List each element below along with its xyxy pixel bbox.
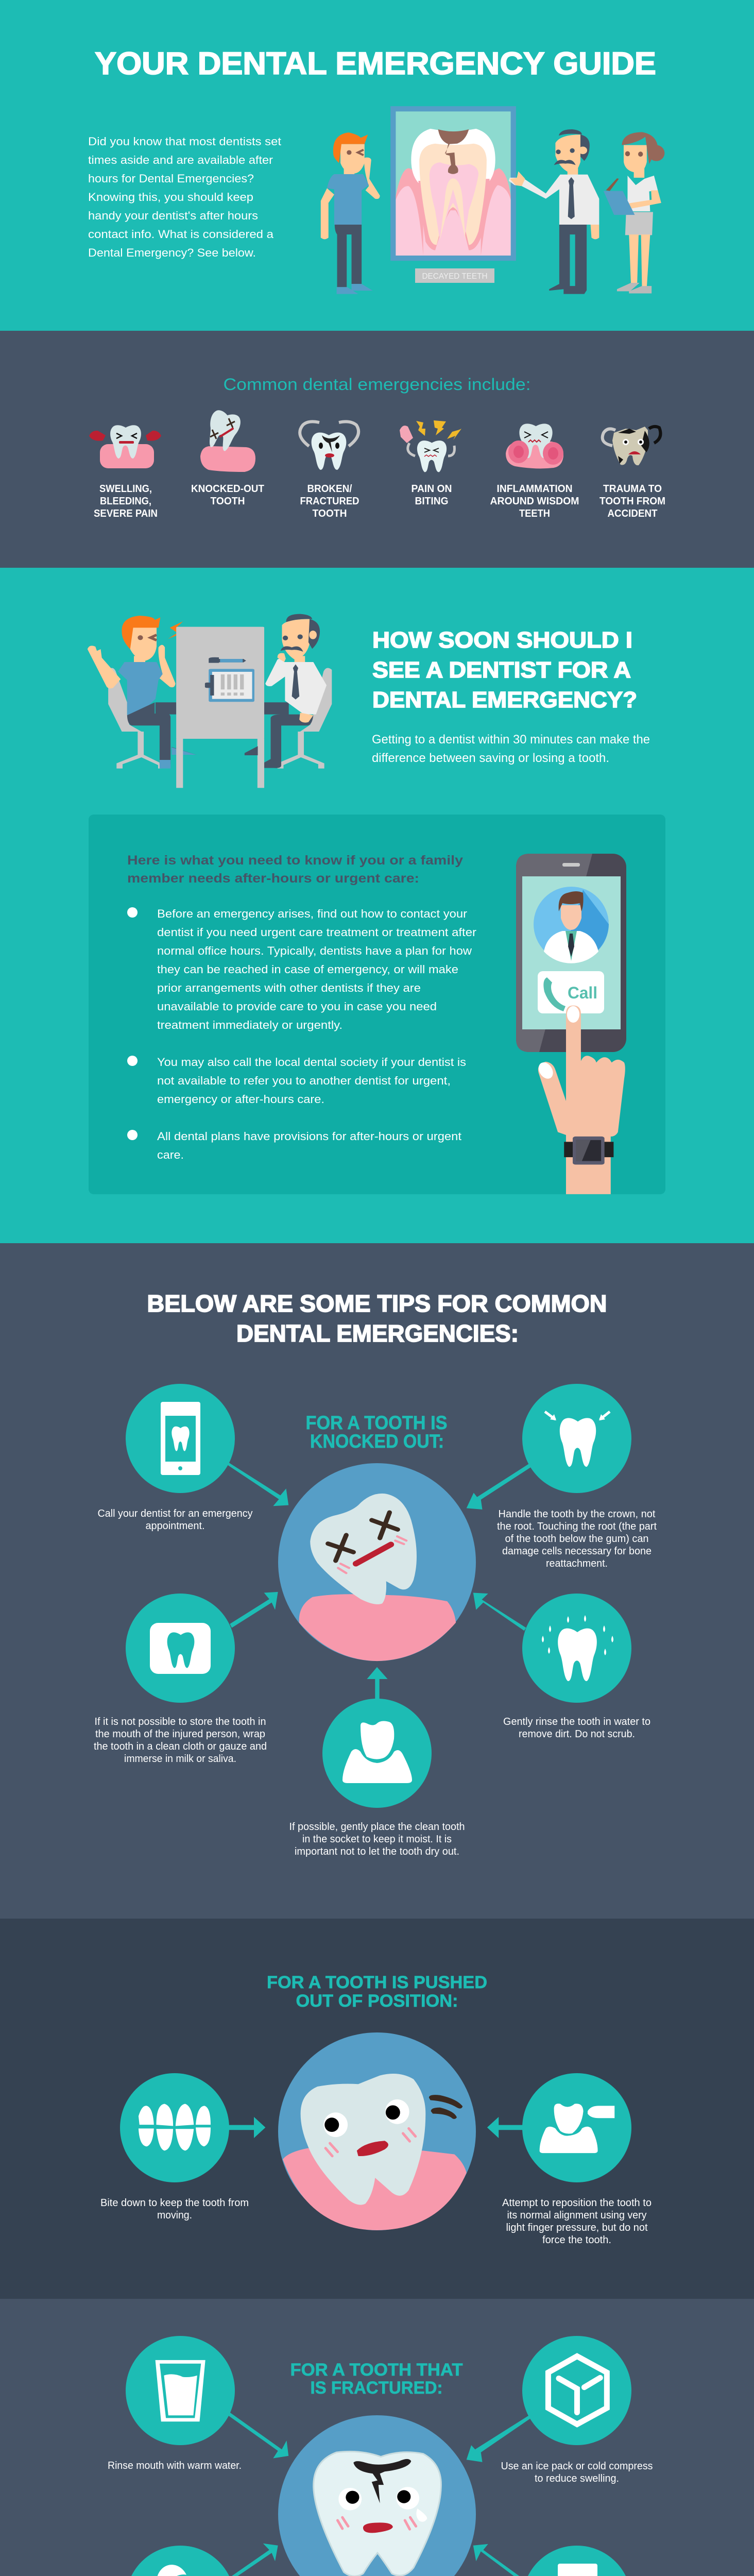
box heading: Here is what you need to know if you or a family bbox=[127, 853, 463, 868]
character: patient bbox=[321, 132, 380, 294]
labels: PAIN ON bbox=[411, 483, 452, 495]
intro text: contact info. What is considered a bbox=[88, 228, 274, 241]
labels: BROKEN/ bbox=[307, 483, 352, 495]
tip: rinse in water: Gently rinse the tooth in water to bbox=[503, 1716, 650, 1727]
labels: ACCIDENT bbox=[608, 508, 657, 519]
tip: store in milk or saliva: immerse in milk or saliva. bbox=[124, 1753, 236, 1765]
tip: reposition: its normal alignment using very bbox=[507, 2210, 647, 2221]
title: YOUR DENTAL EMERGENCY GUIDE bbox=[95, 46, 656, 81]
bullet 1: they can be reached in case of emergency, or will make bbox=[157, 963, 458, 976]
central tooth: out of position bbox=[278, 2032, 476, 2230]
tip: rinse mouth bbox=[108, 2336, 242, 2471]
tip: place in socket bbox=[289, 1699, 465, 1857]
bullet 3: care. bbox=[157, 1148, 184, 1161]
heading: HOW SOON SHOULD I bbox=[372, 628, 632, 653]
tip: place in socket: in the socket to keep it moist. It is bbox=[302, 1834, 452, 1845]
bullet 1: normal office hours. Typically, dentists have a plan for how bbox=[157, 944, 472, 957]
tip: bite down bbox=[100, 2073, 249, 2221]
labels: BITING bbox=[415, 496, 448, 507]
box heading bbox=[127, 853, 463, 886]
intro text: hours for Dental Emergencies? bbox=[88, 172, 254, 185]
tip: place in socket: important not to let the tooth dry out. bbox=[295, 1846, 459, 1857]
panel: tips knocked out bbox=[0, 1243, 754, 1919]
intro text: times aside and are available after bbox=[88, 154, 273, 166]
icon: trauma tooth bbox=[603, 427, 660, 465]
labels: TEETH bbox=[519, 508, 550, 519]
intro text: handy your dentist's after hours bbox=[88, 209, 258, 222]
heading: Common dental emergencies include: bbox=[224, 375, 530, 394]
subheading bbox=[267, 1973, 487, 2011]
arrows bbox=[229, 2117, 523, 2138]
icon: knocked-out tooth bbox=[200, 409, 255, 472]
intro text bbox=[88, 135, 281, 259]
bullet 1: dentist if you need urgent care treatment or treatment after bbox=[157, 926, 476, 939]
subheading: OUT OF POSITION: bbox=[296, 1991, 458, 2011]
tip: call your dentist: Call your dentist for an emergency bbox=[98, 1508, 252, 1519]
panel: after-hours box bbox=[89, 815, 665, 1194]
intro text: Dental Emergency? See below. bbox=[88, 246, 256, 259]
labels: BLEEDING, bbox=[100, 496, 151, 507]
tip: place in socket: If possible, gently place the clean tooth bbox=[289, 1821, 465, 1833]
panel: how soon bbox=[0, 568, 754, 1243]
labels: TRAUMA TO bbox=[603, 483, 662, 495]
tip: store in milk or saliva bbox=[94, 1594, 267, 1765]
intro text: Did you know that most dentists set bbox=[88, 135, 281, 148]
labels: TOOTH bbox=[210, 496, 245, 507]
character: dentist bbox=[509, 129, 599, 294]
subheading bbox=[306, 1412, 447, 1452]
tip: store in milk or saliva: the mouth of the injured person, wrap bbox=[95, 1728, 265, 1740]
tip: rinse mouth: Rinse mouth with warm water. bbox=[108, 2460, 242, 2471]
icon: phone with call button bbox=[516, 854, 626, 1052]
central tooth: knocked out bbox=[278, 1463, 476, 1661]
text block: difference between saving or losing a tooth. bbox=[372, 751, 609, 765]
bullet 2 bbox=[127, 1056, 466, 1106]
icon: inflammation around wisdom teeth bbox=[506, 423, 563, 468]
tip: bite down: moving. bbox=[157, 2210, 192, 2221]
heading: DENTAL EMERGENCY? bbox=[372, 687, 637, 713]
panel: common dental emergencies bbox=[0, 331, 754, 568]
subheading: FOR A TOOTH THAT bbox=[290, 2360, 463, 2380]
bullet 2: not available to refer you to another dentist for urgent, bbox=[157, 1074, 451, 1087]
subheading bbox=[290, 2360, 463, 2398]
bullet 3 bbox=[127, 1130, 461, 1161]
tip: reposition bbox=[502, 2073, 652, 2246]
arrows bbox=[227, 1461, 531, 1700]
intro text: Knowing this, you should keep bbox=[88, 191, 253, 204]
tip: reposition: light finger pressure, but do not bbox=[506, 2222, 648, 2233]
bullet 2: You may also call the local dental society if your dentist is bbox=[157, 1056, 466, 1069]
tip: store in milk or saliva: the tooth in a clean cloth or gauze and bbox=[94, 1741, 267, 1752]
tip: bite down: Bite down to keep the tooth from bbox=[100, 2197, 249, 2209]
heading: DENTAL EMERGENCIES: bbox=[236, 1320, 519, 1347]
tip: call your dentist: appointment. bbox=[145, 1520, 205, 1532]
subheading: IS FRACTURED: bbox=[310, 2378, 443, 2398]
labels bbox=[94, 483, 665, 519]
tip: handle by the crown: Handle the tooth by the crown, not bbox=[499, 1509, 656, 1520]
tip: reposition: force the tooth. bbox=[542, 2234, 611, 2246]
tip: ibuprofen bbox=[101, 2546, 259, 2576]
labels: SWELLING, bbox=[99, 483, 152, 495]
tip: store in milk or saliva: If it is not possible to store the tooth in bbox=[95, 1716, 266, 1727]
character: assistant bbox=[604, 132, 664, 293]
tip: handle by the crown: reattachment. bbox=[546, 1558, 608, 1569]
tip: call your dentist bbox=[492, 2546, 662, 2576]
central tooth: fractured bbox=[278, 2415, 476, 2576]
illustration: patient and dentist at divider bbox=[88, 614, 332, 788]
labels: KNOCKED-OUT bbox=[191, 483, 264, 495]
panel: tooth pushed out of position bbox=[0, 1919, 754, 2299]
subheading: KNOCKED OUT: bbox=[310, 1431, 444, 1452]
tip: handle by the crown bbox=[497, 1384, 657, 1569]
subheading: FOR A TOOTH IS PUSHED bbox=[267, 1973, 487, 1992]
panel: hero bbox=[0, 0, 754, 331]
tip: handle by the crown: damage cells necessary for bone bbox=[502, 1546, 652, 1557]
sign: decayed teeth: DECAYED TEETH bbox=[422, 272, 487, 281]
tip: call your dentist bbox=[98, 1384, 252, 1532]
icon: broken tooth bbox=[300, 421, 358, 470]
tip: handle by the crown: of the tooth below the gum) can bbox=[505, 1533, 649, 1545]
tip: rinse in water bbox=[503, 1594, 650, 1740]
labels: TOOTH bbox=[312, 508, 347, 519]
tip: ice pack: to reduce swelling. bbox=[535, 2473, 619, 2484]
labels: AROUND WISDOM bbox=[490, 496, 579, 507]
icon: hand with watch bbox=[537, 1006, 625, 1194]
tip: reposition: Attempt to reposition the tooth to bbox=[502, 2197, 652, 2209]
illustration: decayed tooth poster bbox=[390, 106, 516, 261]
labels: SEVERE PAIN bbox=[94, 508, 158, 519]
tip: ice pack bbox=[501, 2336, 653, 2484]
labels: FRACTURED bbox=[300, 496, 359, 507]
subheading: FOR A TOOTH IS bbox=[306, 1412, 447, 1433]
icon: phone with call button: Call bbox=[568, 984, 597, 1002]
panel: fractured tooth bbox=[0, 2299, 754, 2576]
tip: ice pack: Use an ice pack or cold compress bbox=[501, 2461, 653, 2472]
icon: swelling tooth bbox=[89, 425, 161, 468]
heading bbox=[147, 1290, 607, 1347]
bullet 1: unavailable to provide care to you in case you need bbox=[157, 1000, 437, 1013]
heading: SEE A DENTIST FOR A bbox=[372, 657, 631, 683]
tip: handle by the crown: the root. Touching the root (the part bbox=[497, 1521, 657, 1532]
arrows bbox=[226, 2412, 532, 2576]
bullet 1: treatment immediately or urgently. bbox=[157, 1019, 342, 1031]
box heading: member needs after-hours or urgent care: bbox=[127, 871, 419, 886]
labels: TOOTH FROM bbox=[599, 496, 665, 507]
bullet 3: All dental plans have provisions for after-hours or urgent bbox=[157, 1130, 461, 1143]
heading: BELOW ARE SOME TIPS FOR COMMON bbox=[147, 1290, 607, 1317]
bullet 1 bbox=[127, 907, 476, 1031]
text block bbox=[372, 733, 650, 765]
text block: Getting to a dentist within 30 minutes can make the bbox=[372, 733, 650, 747]
labels: INFLAMMATION bbox=[496, 483, 573, 495]
bullet 1: prior arrangements with other dentists if they are bbox=[157, 981, 421, 994]
bullet 2: emergency or after-hours care. bbox=[157, 1093, 324, 1106]
sign: decayed teeth bbox=[415, 268, 494, 283]
bullet 1: Before an emergency arises, find out how to contact your bbox=[157, 907, 467, 920]
tip: rinse in water: remove dirt. Do not scrub. bbox=[519, 1728, 635, 1740]
heading bbox=[372, 628, 637, 713]
icon: pain on biting bbox=[400, 420, 461, 472]
